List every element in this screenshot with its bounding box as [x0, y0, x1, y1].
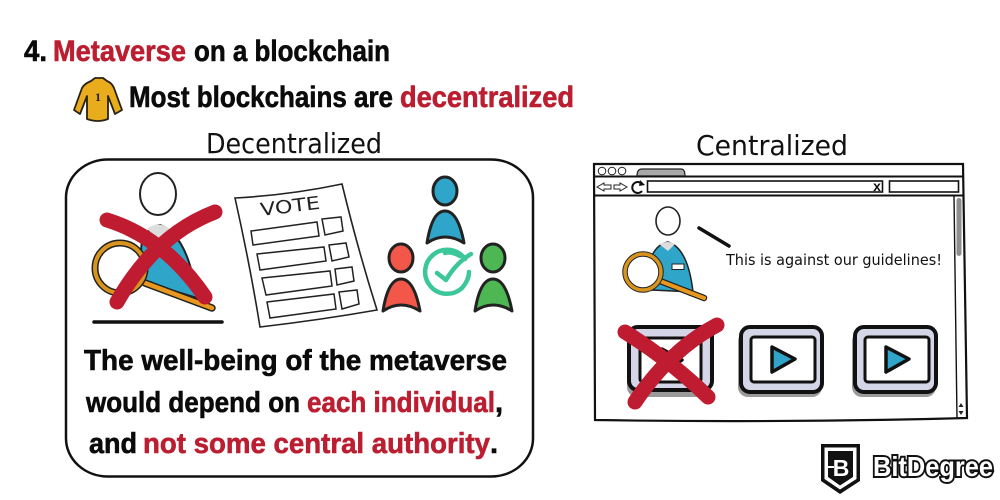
- icon: green check: [425, 250, 471, 294]
- speech text: This is against our guidelines!: [725, 251, 942, 269]
- icon: moderator with magnifier: [625, 207, 704, 298]
- subtitle: [129, 81, 574, 114]
- panel: centralized browser: [594, 164, 967, 421]
- panel text: not some central authority: [143, 428, 490, 460]
- video: allowed 1: [738, 327, 822, 397]
- browser toolbar: [594, 178, 964, 196]
- icon: vote ballot: [235, 184, 377, 327]
- panel text: .: [490, 428, 498, 460]
- panel: decentralized: [66, 160, 533, 476]
- icon: crossed-out moderator: [94, 173, 222, 322]
- panel text: would depend on: [85, 387, 300, 419]
- title: Metaverse: [53, 35, 186, 68]
- title: [24, 35, 390, 68]
- subtitle: decentralized: [400, 81, 574, 114]
- logo: BitDegree: [821, 444, 993, 494]
- title: 4.: [24, 35, 47, 68]
- icon: vote ballot: VOTE: [259, 193, 321, 221]
- browser tab bar: [594, 167, 963, 176]
- video: removed: [625, 325, 717, 402]
- title: on a blockchain: [194, 35, 390, 68]
- heading: Centralized: Centralized: [696, 129, 848, 162]
- logo shield: [821, 444, 860, 494]
- browser window frame: [594, 164, 967, 421]
- panel text: and: [89, 428, 137, 460]
- panel border: [66, 160, 533, 476]
- subtitle: Most blockchains are: [129, 81, 393, 114]
- video: allowed 2: [852, 327, 936, 397]
- icon: group of voters: [383, 177, 512, 311]
- panel text: each individual: [307, 387, 495, 419]
- scrollbar: [954, 196, 964, 419]
- panel text: The well-being of the metaverse: [84, 345, 507, 377]
- icon: yellow jersey: 1: [95, 90, 101, 104]
- heading: Decentralized: Decentralized: [206, 127, 382, 160]
- speech line: [699, 228, 729, 246]
- panel text: [84, 345, 507, 460]
- icon: yellow jersey: [74, 78, 122, 121]
- panel text: ,: [495, 387, 503, 419]
- logo shield: B: [833, 455, 849, 481]
- browser toolbar: x: [873, 178, 881, 194]
